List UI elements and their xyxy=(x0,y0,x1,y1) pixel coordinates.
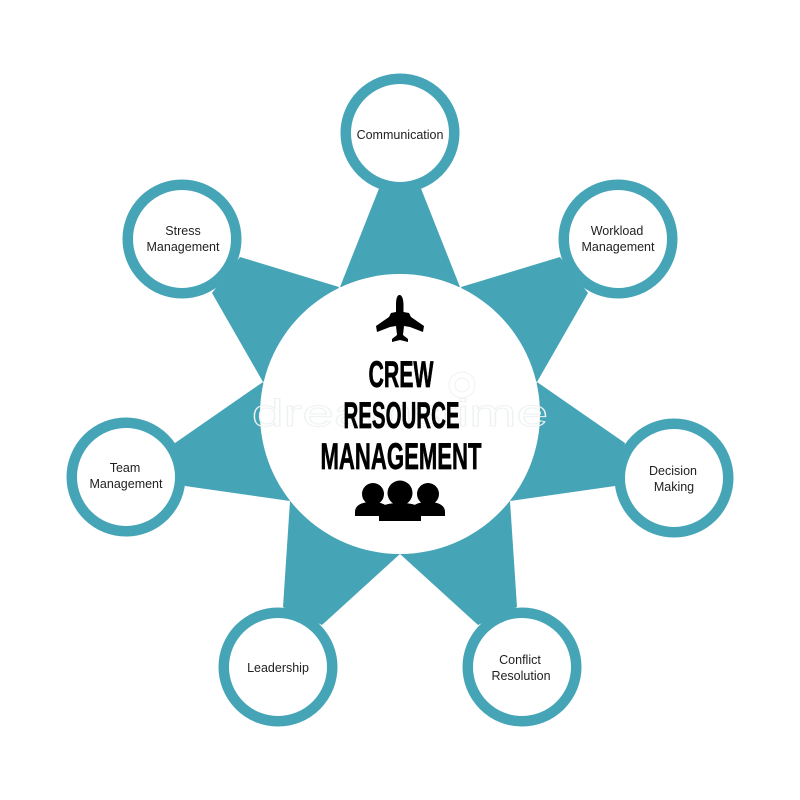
title: MANAGEMENT xyxy=(320,436,482,477)
node: Conflict Resolution: Resolution xyxy=(491,669,551,683)
icon: team of people xyxy=(355,480,445,521)
node: Decision Making: Making xyxy=(654,480,694,494)
node: Team Management: Management xyxy=(90,477,163,491)
title: CREW xyxy=(368,354,434,395)
node: Conflict Resolution: Conflict xyxy=(499,653,541,667)
node: Workload Management: Management xyxy=(582,240,655,254)
central hub circle xyxy=(260,274,540,554)
node: Leadership xyxy=(224,613,332,721)
node: Stress Management xyxy=(128,185,236,293)
node: Workload Management: Workload xyxy=(591,224,643,238)
node: Stress Management: Stress xyxy=(165,224,201,238)
node: Communication xyxy=(346,79,454,187)
icon: airplane xyxy=(376,295,424,342)
node: Conflict Resolution xyxy=(468,613,576,721)
watermark xyxy=(252,372,548,435)
node: Team Management xyxy=(72,423,180,531)
star wedges connecting hub to outer circles xyxy=(175,186,625,625)
node: Communication: Communication xyxy=(357,128,443,142)
title xyxy=(320,354,482,477)
node: Stress Management: Management xyxy=(147,240,220,254)
node: Leadership: Leadership xyxy=(247,661,309,675)
node: Team Management: Team xyxy=(110,461,140,475)
title: RESOURCE xyxy=(344,395,460,436)
node: Decision Making xyxy=(620,424,728,532)
node: Workload Management xyxy=(564,185,672,293)
watermark: dreamstime xyxy=(252,393,548,435)
node: Decision Making: Decision xyxy=(649,464,697,478)
